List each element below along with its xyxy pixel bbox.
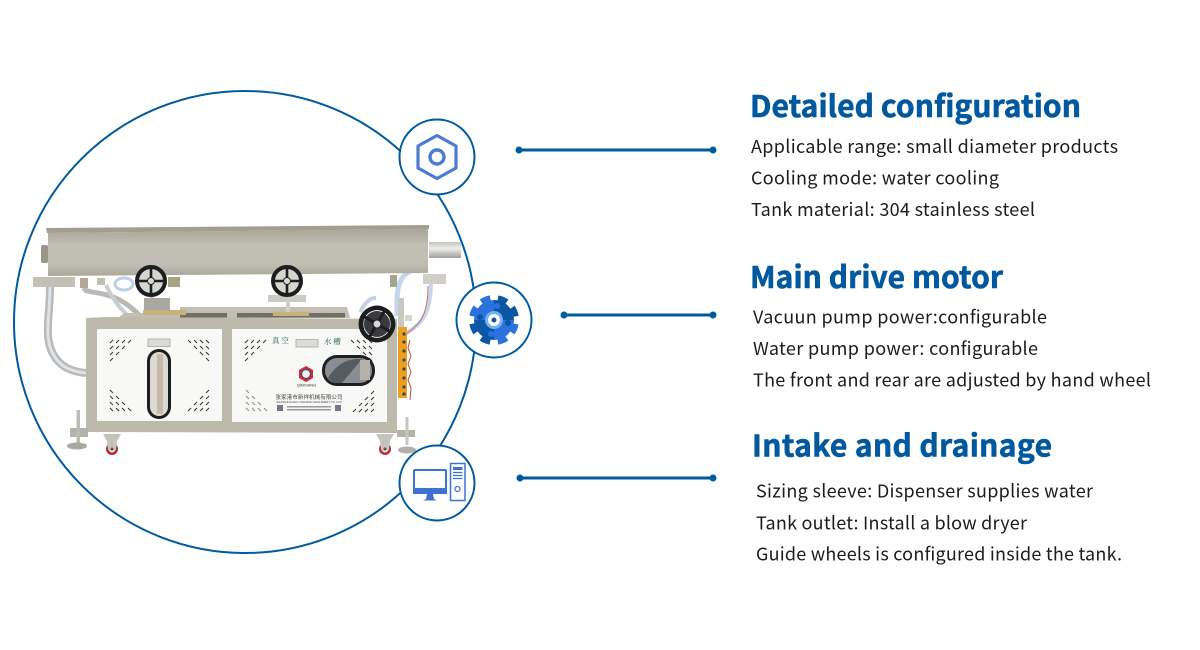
large circle outline bbox=[14, 91, 476, 553]
tank label: 真 空 bbox=[272, 335, 289, 346]
text block: Sizing sleeve: Dispenser supplies water bbox=[756, 478, 1094, 504]
left sight window bbox=[147, 349, 171, 419]
company name: 张家港市新祥机械有限公司 bbox=[276, 393, 342, 401]
text block: Water pump power: configurable bbox=[753, 335, 1038, 361]
heading: Main drive motor bbox=[750, 253, 1004, 297]
text block: Guide wheels is configured inside the tank. bbox=[756, 540, 1122, 566]
tank label: 水 槽 bbox=[324, 336, 341, 347]
text block bbox=[751, 133, 1118, 222]
logo: QINXIANG bbox=[297, 382, 316, 388]
icon: desktop computer bbox=[400, 446, 474, 520]
hand wheel mounts bbox=[143, 277, 309, 316]
text block bbox=[753, 304, 1151, 392]
right panel bbox=[232, 329, 387, 422]
text block: Applicable range: small diameter products bbox=[751, 133, 1118, 159]
right sight window bbox=[322, 355, 375, 386]
left panel bbox=[97, 329, 222, 421]
cabinet rear rim bbox=[118, 307, 350, 318]
inlet flange bbox=[41, 245, 48, 263]
text block: Vacuun pump power:configurable bbox=[753, 304, 1047, 330]
section: main drive motor bbox=[750, 253, 1151, 392]
text block: The front and rear are adjusted by hand wheel bbox=[753, 366, 1151, 392]
hand wheels bbox=[137, 267, 399, 346]
tank body bbox=[48, 229, 428, 276]
ventilation slots bbox=[110, 340, 374, 412]
text block: Cooling mode: water cooling bbox=[751, 164, 999, 190]
orange terminal block bbox=[398, 327, 411, 400]
section: detailed configuration bbox=[750, 82, 1118, 222]
logo bbox=[297, 366, 316, 388]
heading: Detailed configuration bbox=[750, 82, 1081, 126]
heading: Intake and drainage bbox=[752, 422, 1052, 466]
connector line 2 bbox=[560, 312, 716, 318]
feet and casters bbox=[67, 410, 416, 455]
tank label bbox=[272, 335, 341, 347]
text block bbox=[756, 478, 1122, 566]
handles bbox=[148, 339, 318, 347]
section: intake and drainage bbox=[752, 422, 1122, 566]
connector line 3 bbox=[516, 474, 716, 482]
outlet pipe bbox=[429, 242, 461, 258]
tank rim bbox=[46, 225, 429, 233]
machine photo: vacuum water tank bbox=[33, 225, 461, 455]
connector line 1 bbox=[516, 146, 716, 154]
rear connecting hoses bbox=[84, 270, 431, 337]
left hose bbox=[48, 287, 87, 373]
text block: Tank outlet: Install a blow dryer bbox=[756, 510, 1028, 536]
icon: puzzle gear bbox=[456, 282, 532, 358]
text block: Tank material: 304 stainless steel bbox=[751, 196, 1035, 222]
cabinet frame bbox=[86, 317, 397, 433]
icon: hexagon nut bbox=[400, 120, 474, 194]
support brackets bbox=[33, 274, 446, 288]
company name bbox=[276, 393, 342, 411]
valve fittings bbox=[398, 298, 412, 327]
company name: ZHANGJIAGANG XINXIANG MACHINERY CO.,LTD bbox=[276, 400, 342, 404]
